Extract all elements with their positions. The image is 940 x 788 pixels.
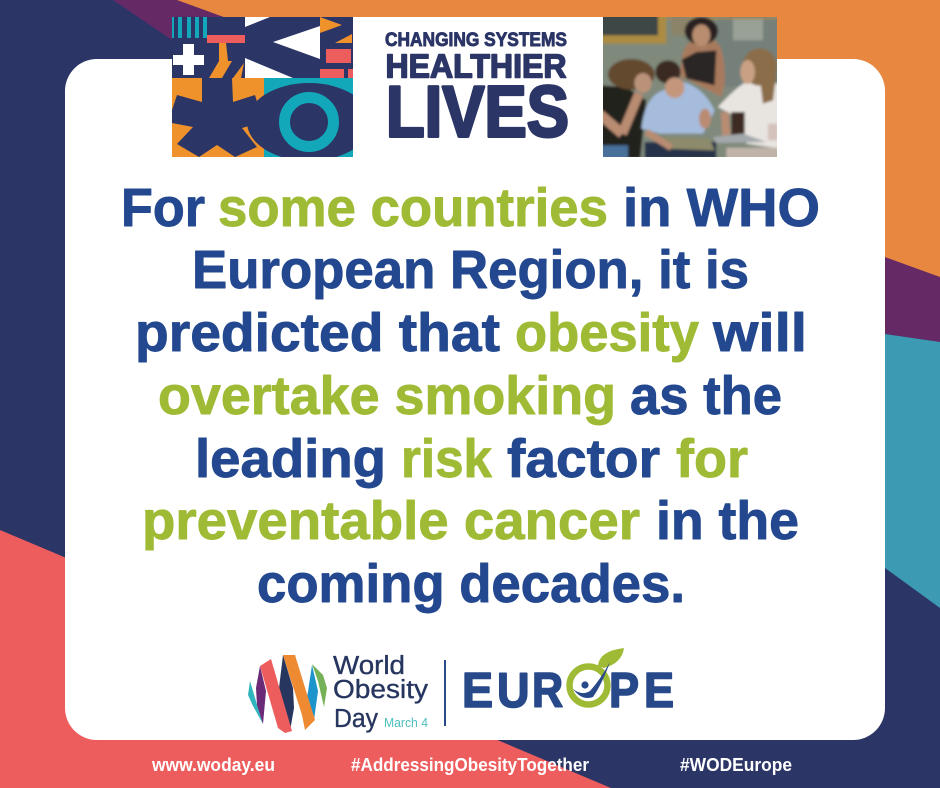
line 1 xyxy=(121,178,820,238)
Europe wordmark: R xyxy=(532,662,563,718)
footer links xyxy=(151,755,792,775)
woman at back xyxy=(681,40,725,97)
World Obesity Day logo xyxy=(248,648,674,733)
woman on right xyxy=(718,82,780,149)
line 5: risk xyxy=(401,429,493,489)
line 1: some countries xyxy=(218,178,608,238)
logo text: Obesity xyxy=(333,676,428,704)
Europe wordmark: U xyxy=(497,662,530,717)
logo text xyxy=(333,652,428,733)
Europe wordmark: E xyxy=(644,662,674,717)
woman in blue shirt xyxy=(641,82,715,134)
icon: green ring O with leaf and figure xyxy=(570,648,624,704)
teal stripes xyxy=(172,17,207,38)
woman on left xyxy=(600,85,646,159)
logo text: Day xyxy=(334,705,378,733)
logo text: March 4 xyxy=(384,715,428,730)
header title: LIVES xyxy=(386,72,569,152)
header white band xyxy=(352,17,604,157)
line 6: in the xyxy=(656,491,799,551)
line 1: in WHO xyxy=(623,178,820,238)
header title xyxy=(385,29,569,152)
red bar xyxy=(207,35,245,43)
line 4: overtake smoking xyxy=(158,366,616,426)
white plus xyxy=(173,44,204,75)
white card panel xyxy=(65,59,885,740)
main statement text xyxy=(121,178,820,614)
white triangles xyxy=(245,17,320,78)
teal block with eye xyxy=(264,78,353,157)
line 5 xyxy=(195,429,748,489)
Europe wordmark xyxy=(462,648,674,718)
line 2: European Region, it is xyxy=(192,240,749,300)
Europe wordmark: E xyxy=(462,664,493,718)
lower right clothing xyxy=(726,148,780,159)
website: www.woday.eu xyxy=(151,755,275,775)
line 3: obesity xyxy=(515,303,699,363)
line 7: coming decades. xyxy=(257,554,685,614)
line 3 xyxy=(135,303,807,363)
arms and hands xyxy=(646,132,671,148)
logo divider xyxy=(444,660,446,726)
photo album xyxy=(658,137,715,150)
campaign hashtag: #AddressingObesityTogether xyxy=(351,755,589,775)
orange T shape xyxy=(209,43,232,78)
orange block with asterisk xyxy=(172,78,264,157)
header title: HEALTHIER xyxy=(386,48,567,84)
dark gap between figures xyxy=(731,112,745,135)
logo text: World xyxy=(333,652,405,680)
line 5: leading xyxy=(195,429,386,489)
line 5: factor xyxy=(507,429,660,489)
line 3: predicted that xyxy=(135,303,500,363)
line 3: will xyxy=(712,303,807,363)
right orange and red shapes xyxy=(320,17,342,33)
logo mark: ribbon circle xyxy=(248,655,327,733)
header title: CHANGING SYSTEMS xyxy=(385,29,567,51)
photo: four women looking at an album xyxy=(600,14,781,160)
wall stripes and curtain xyxy=(717,20,777,86)
line 6: preventable cancer xyxy=(142,491,640,551)
line 4: as the xyxy=(630,366,782,426)
Europe hashtag: #WODEurope xyxy=(680,755,792,775)
line 5: for xyxy=(676,429,748,489)
icon: campaign geometric pattern xyxy=(172,17,353,157)
line 1: For xyxy=(121,178,205,238)
Europe wordmark: P xyxy=(609,662,639,717)
wall frames xyxy=(600,14,666,44)
